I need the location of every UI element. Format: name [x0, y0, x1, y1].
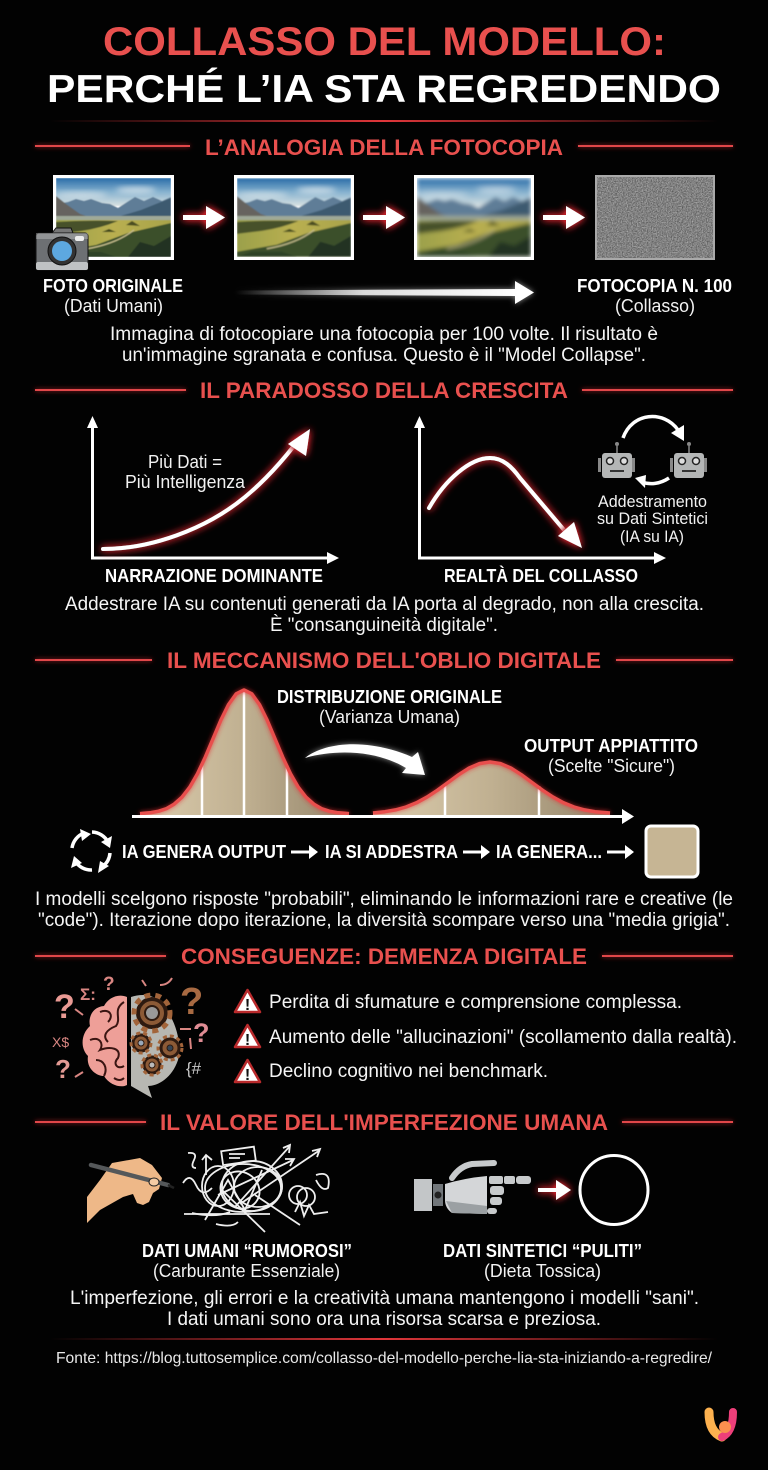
flow: process steps: IA SI ADDESTRA	[325, 842, 458, 862]
heading: imperfezione: IL VALORE DELL'IMPERFEZIONE UMANA	[160, 1110, 608, 1135]
chart: narrazione dominante: Più Intelligenza	[125, 472, 246, 492]
heading: conseguenze: CONSEGUENZE: DEMENZA DIGITALE	[181, 944, 587, 969]
circle: clean data	[580, 1156, 648, 1224]
label: foto originale	[43, 276, 183, 316]
consequence 1: !	[245, 997, 250, 1014]
source: Fonte: https://blog.tuttosemplice.com/collasso-del-modello-perche-lia-sta-iniziando-a-regredire/	[56, 1350, 713, 1367]
photo 2 copy	[234, 175, 354, 260]
consequence 2: Aumento delle "allucinazioni" (scollamento dalla realtà).	[269, 1027, 737, 1048]
label: distribuzione originale	[277, 687, 502, 727]
title	[47, 20, 721, 111]
text: analogia body: un'immagine sgranata e confusa. Questo è il "Model Collapse".	[122, 345, 646, 366]
arrow 3	[543, 206, 585, 229]
photo 4 noise	[595, 175, 715, 260]
text: imperfezione body	[70, 1288, 699, 1330]
photo 3 blurred	[414, 175, 534, 260]
heading: analogia: L’ANALOGIA DELLA FOTOCOPIA	[205, 135, 563, 160]
icon: brain with gears: ?	[54, 988, 75, 1026]
icon: scribble	[183, 1145, 329, 1232]
icon: cycle	[71, 829, 112, 873]
heading: meccanismo: IL MECCANISMO DELL'OBLIO DIGITALE	[167, 648, 601, 673]
icon: brain with gears: {#	[186, 1059, 202, 1078]
icon: robots training loop: Addestramento	[598, 492, 707, 511]
consequence 3: !	[245, 1067, 250, 1084]
icon: brain with gears: ?	[103, 974, 115, 995]
consequence 1: Perdita di sfumature e comprensione complessa.	[269, 992, 682, 1013]
icon: robots training loop: su Dati Sintetici	[597, 509, 708, 528]
icon: robot hand	[414, 1163, 531, 1214]
icon: brain with gears	[52, 974, 210, 1098]
flow: process steps: IA GENERA OUTPUT	[122, 842, 286, 862]
icon: brain with gears: ?	[55, 1054, 71, 1084]
panel: meccanismo dell'oblio digitale	[35, 648, 733, 931]
label: output appiattito: OUTPUT APPIATTITO	[524, 736, 698, 756]
text: analogia body: Immagina di fotocopiare una fotocopia per 100 volte. Il risultato è	[110, 324, 658, 345]
arrow 1	[183, 206, 225, 229]
panel: valore dell'imperfezione umana	[35, 1110, 733, 1330]
flow: process steps	[122, 842, 634, 862]
consequence 3: Declino cognitivo nei benchmark.	[269, 1061, 548, 1082]
icon: brain with gears: X$	[52, 1034, 69, 1050]
chart: distribuzione originale	[140, 690, 349, 816]
label: fotocopia 100: FOTOCOPIA N. 100	[577, 276, 732, 296]
label: distribuzione originale: DISTRIBUZIONE ORIGINALE	[277, 687, 502, 707]
text: meccanismo body	[35, 889, 733, 931]
label: dati sintetici: (Dieta Tossica)	[484, 1261, 601, 1281]
label: foto originale: FOTO ORIGINALE	[43, 276, 183, 296]
label: realta del collasso: REALTÀ DEL COLLASSO	[444, 565, 638, 586]
label: dati sintetici: DATI SINTETICI “PULITI”	[443, 1241, 642, 1261]
icon: hand with pen	[87, 1158, 174, 1223]
text: paradosso body	[65, 594, 704, 636]
label: distribuzione originale: (Varianza Umana)	[319, 707, 460, 727]
chart: narrazione dominante: Più Dati =	[148, 452, 222, 472]
label: dati umani: (Carburante Essenziale)	[153, 1261, 340, 1281]
label: narrazione dominante: NARRAZIONE DOMINANTE	[105, 566, 323, 586]
text: paradosso body: È "consanguineità digitale".	[270, 615, 498, 636]
title: PERCHÉ L’IA STA REGREDENDO	[47, 67, 721, 111]
label: fotocopia 100	[577, 276, 732, 316]
logo	[709, 1412, 733, 1437]
label: fotocopia 100: (Collasso)	[615, 296, 695, 316]
label: dati umani: DATI UMANI “RUMOROSI”	[142, 1241, 352, 1261]
heading: paradosso: IL PARADOSSO DELLA CRESCITA	[200, 378, 568, 403]
text: imperfezione body: L'imperfezione, gli errori e la creatività umana mantengono i modelli "sani".	[70, 1288, 699, 1309]
text: meccanismo body: "code"). Iterazione dopo iterazione, la diversità scompare verso una "media grigia".	[38, 910, 730, 931]
icon: brain with gears: ?	[180, 981, 203, 1023]
label: output appiattito	[524, 736, 698, 776]
icon: camera	[36, 228, 88, 270]
icon: brain with gears: Σ:	[80, 985, 96, 1004]
long arrow	[235, 281, 534, 304]
photo 1 original	[53, 175, 174, 260]
label: dati sintetici	[443, 1241, 642, 1281]
icon: robots training loop: (IA su IA)	[620, 527, 684, 546]
icon: brain with gears: ?	[193, 1018, 210, 1048]
flow: process steps: IA GENERA...	[496, 842, 602, 862]
text: imperfezione body: I dati umani sono ora una risorsa scarsa e preziosa.	[167, 1309, 601, 1330]
arrow 2	[363, 206, 405, 229]
axis	[132, 809, 634, 824]
chart: narrazione dominante	[87, 416, 339, 564]
panel: conseguenze	[35, 944, 737, 1098]
text: meccanismo body: I modelli scelgono risposte "probabili", eliminando le informazioni rare e creative (le	[35, 889, 733, 910]
label: output appiattito: (Scelte "Sicure")	[548, 756, 675, 776]
label: dati umani	[142, 1241, 352, 1281]
chart: realta del collasso	[414, 416, 666, 564]
icon: robots training loop	[597, 417, 708, 546]
panel: analogia della fotocopia	[35, 135, 733, 366]
text: analogia body	[110, 324, 658, 366]
text: paradosso body: Addestrare IA su contenuti generati da IA porta al degrado, non alla crescita.	[65, 594, 704, 615]
panel: paradosso della crescita	[35, 378, 733, 636]
title: COLLASSO DEL MODELLO:	[103, 20, 666, 64]
curved arrow	[305, 744, 425, 775]
consequence 2: !	[245, 1032, 250, 1049]
arrow: to empty circle	[538, 1180, 571, 1200]
chart: output appiattito	[373, 762, 610, 816]
square: grey average	[646, 826, 698, 877]
label: foto originale: (Dati Umani)	[64, 296, 163, 316]
